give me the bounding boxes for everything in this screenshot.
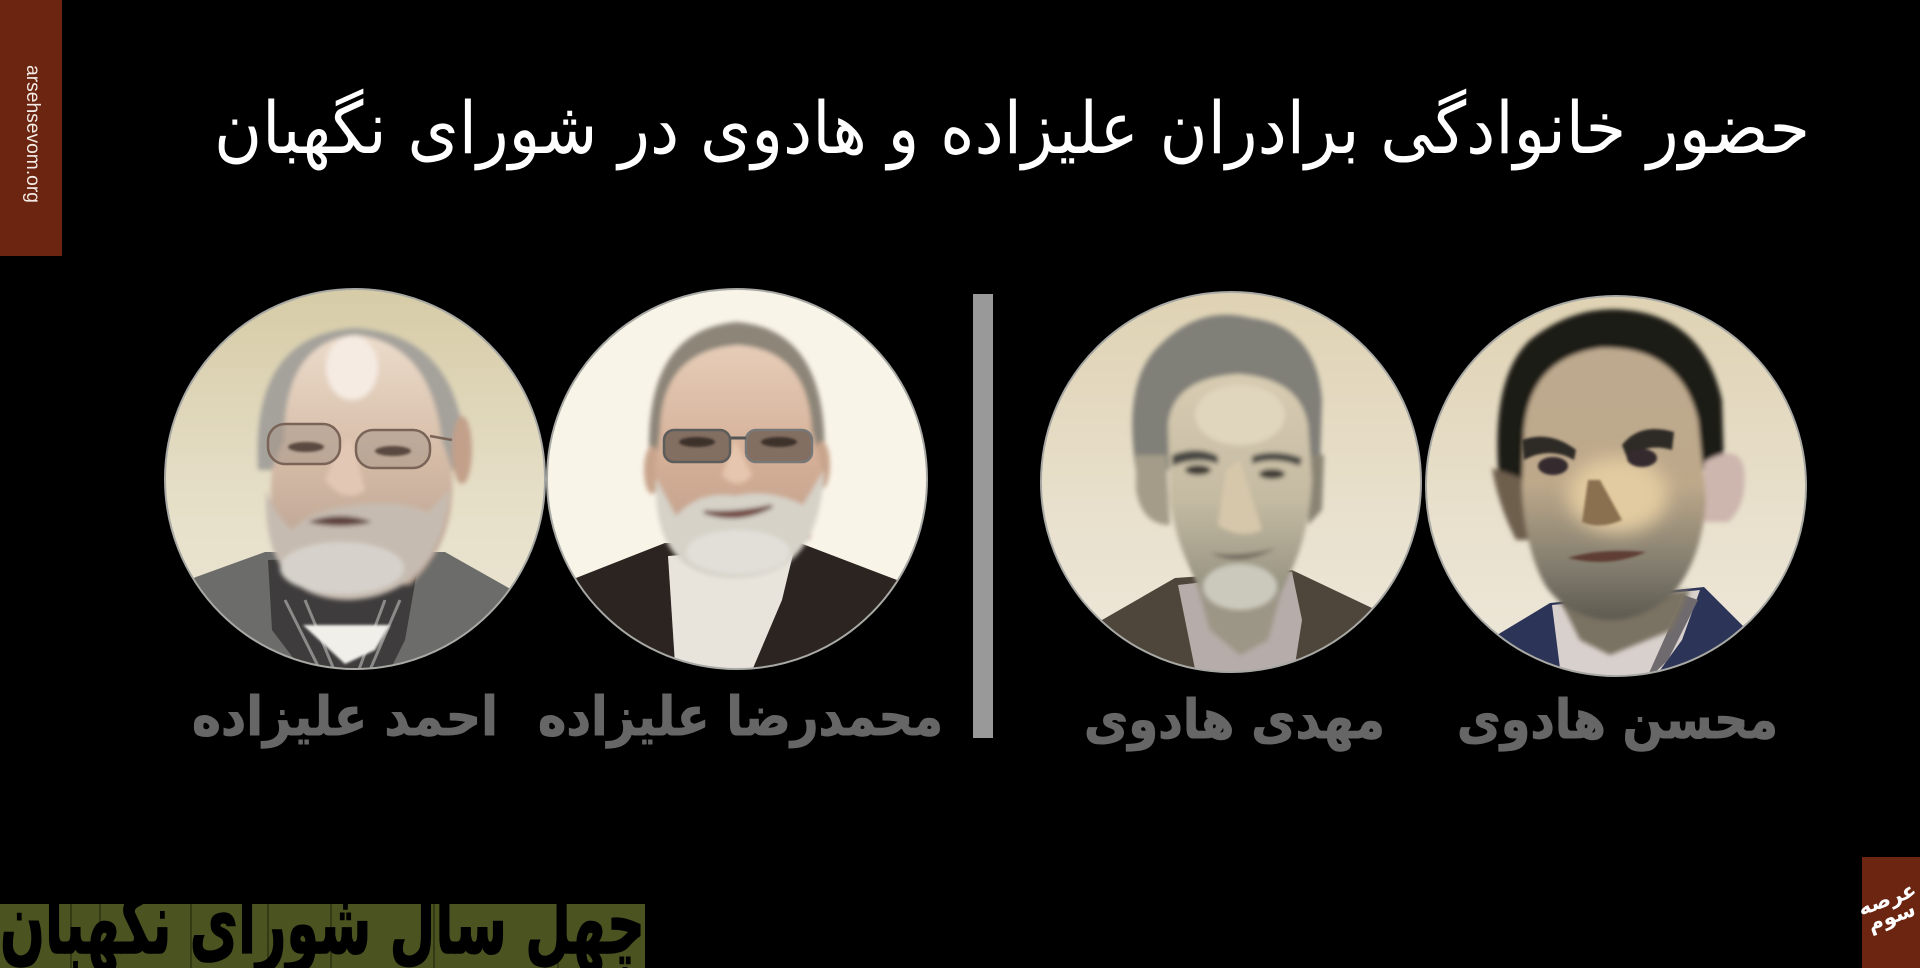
name: Ahmad Alizadeh: احمد علیزاده bbox=[192, 685, 498, 748]
side tab: website bbox=[0, 0, 62, 256]
portrait: Ahmad Alizadeh bbox=[150, 285, 560, 680]
name: Mohsen Hadavi: محسن هادوی bbox=[1457, 688, 1778, 751]
banner: forty years of the Guardian Council bbox=[0, 904, 645, 968]
divider bar bbox=[973, 294, 993, 738]
name: Mahdi Hadavi: مهدی هادوی bbox=[1084, 688, 1385, 751]
name: Mohammadreza Alizadeh: محمدرضا علیزاده bbox=[538, 685, 943, 748]
logo text: arseh sevom: عرصه bbox=[1855, 877, 1920, 921]
logo text: arseh sevom: سوم bbox=[1864, 897, 1919, 936]
portrait: Mohammadreza Alizadeh bbox=[545, 285, 935, 680]
portrait: Mahdi Hadavi bbox=[1036, 288, 1426, 684]
title: حضور خانوادگی برادران علیزاده و هادوی در شورای نگهبان bbox=[214, 86, 1810, 171]
corner tab with logo bbox=[1855, 857, 1920, 968]
side tab: website: arsehsevom.org bbox=[22, 65, 43, 203]
portrait: Mohsen Hadavi bbox=[1422, 292, 1812, 690]
